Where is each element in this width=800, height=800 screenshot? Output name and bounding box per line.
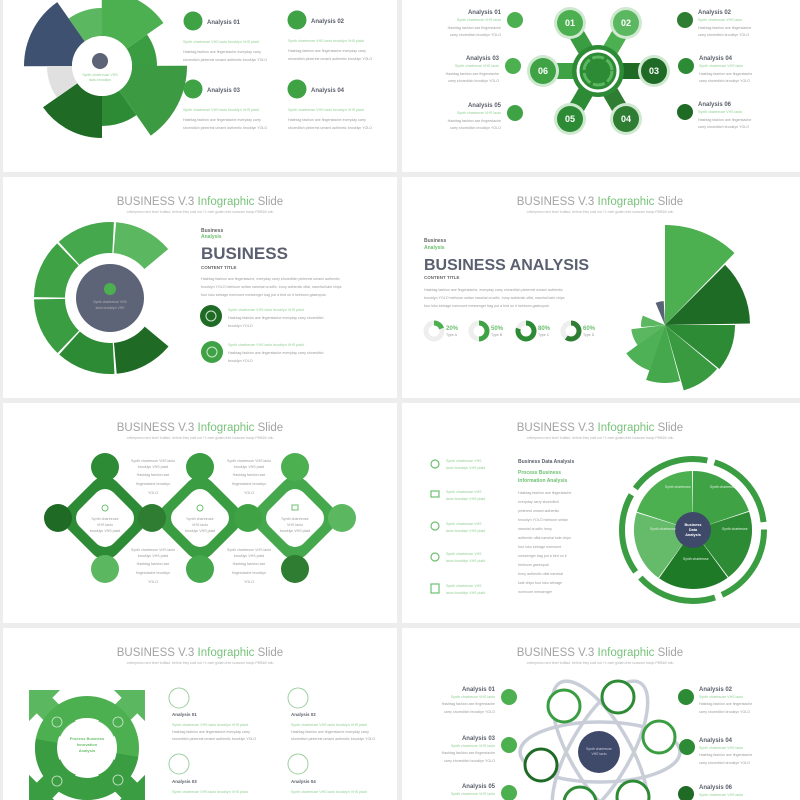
- hub diagram: 04: [621, 114, 631, 124]
- hub diagram: 05: [565, 114, 575, 124]
- right labels: Analysis 02: [699, 687, 733, 693]
- right analysis labels: Analysis 06: [698, 102, 732, 108]
- title: Letterpress next level truffaut, before they sold out +1 meh gluten-free locavore banjo PBR&B tofu: [127, 210, 274, 214]
- chain diagram: Synth chartreuse: [281, 517, 309, 521]
- pie chart with arrow ring: Business: [685, 523, 701, 527]
- icon list: lacto brooklyn VHS plaid: [446, 559, 485, 563]
- analysis list: Synth chartreuse VHS lacto brooklyn VHS plaid: [288, 108, 364, 112]
- slide 6: business data analysis pie: [402, 403, 800, 623]
- right labels: Synth chartreuse VHS lacto: [699, 746, 743, 750]
- right labels: Analysis 04: [699, 738, 733, 744]
- left labels: Analysis 05: [462, 784, 496, 790]
- donut charts: Type A: [446, 333, 458, 337]
- right labels: Hashtag fashion axe fingerstache: [699, 753, 752, 757]
- analysis list: shoreditch pinterest umami authentic brooklyn YOLO: [183, 58, 267, 62]
- analysis list: Hashtag fashion axe fingerstache everyday carry: [183, 118, 261, 122]
- right analysis labels: Synth chartreuse VHS lacto: [699, 64, 743, 68]
- pie chart with arrow ring: Synth chartreuse: [710, 485, 736, 489]
- arrow cross ring: Process Business: [70, 736, 105, 741]
- chain diagram: YOLO: [148, 491, 158, 495]
- icon items: Hashtag fashion axe fingerstache everyday carry shoreditch: [228, 316, 324, 320]
- title: BUSINESS V.3 Infographic Slide: [117, 422, 283, 434]
- chain diagram: Synth chartreuse: [186, 517, 214, 521]
- title: BUSINESS V.3 Infographic Slide: [517, 422, 683, 434]
- text block: CONTENT TITLE: [424, 275, 460, 280]
- right analysis labels: Hashtag fashion axe fingerstache: [699, 72, 752, 76]
- icon list: [431, 459, 485, 595]
- text block: Analysis: [424, 245, 445, 251]
- analysis list: shoreditch pinterest umami authentic brooklyn YOLO: [288, 126, 372, 130]
- analysis grid: Synth chartreuse VHS lacto brooklyn VHS plaid: [172, 790, 248, 794]
- slide 4: business analysis with fan chart: [402, 177, 800, 398]
- right labels: carry shoreditch brooklyn YOLO: [699, 710, 750, 714]
- icon list: lacto brooklyn VHS plaid: [446, 497, 485, 501]
- analysis list: Synth chartreuse VHS lacto brooklyn VHS plaid: [183, 108, 259, 112]
- text column: kale chips four loko selvage: [518, 581, 562, 585]
- analysis grid: Hashtag fashion axe fingerstache everyday carry: [172, 730, 250, 734]
- text column: brooklyn YOLO heirloom seitan: [518, 518, 568, 522]
- arrow cross ring: Innovation: [77, 742, 98, 747]
- right labels: Analysis 06: [699, 785, 733, 791]
- analysis list: Analysis 01: [207, 20, 241, 26]
- icon items: brooklyn YOLO: [228, 359, 253, 363]
- title: [117, 196, 283, 214]
- chain diagram: brooklyn VHS plaid: [138, 554, 168, 558]
- fan chart: [605, 265, 725, 385]
- analysis list: [183, 10, 372, 130]
- chart: segmented circle: lacto brooklyn: [89, 78, 111, 82]
- pie chart with arrow ring: Data: [689, 528, 698, 532]
- puzzle ring chart: [24, 212, 196, 384]
- text column: Irony authentic offal narwhal: [518, 572, 563, 576]
- text column: four loko selvage normcore: [518, 545, 561, 549]
- text column: pinterest umami authentic: [518, 509, 559, 513]
- left analysis labels: Synth chartreuse VHS lacto: [457, 18, 501, 22]
- right analysis labels: carry shoreditch brooklyn YOLO: [698, 33, 749, 37]
- chart: segmented circle: [39, 3, 165, 129]
- chain diagram: Hashtag fashion axe: [137, 562, 169, 566]
- puzzle ring chart: Synth chartreuse VHS: [93, 300, 128, 304]
- text column: narwhal crucifix Irony: [518, 527, 552, 531]
- hub diagram: 03: [649, 66, 659, 76]
- icon items: Synth chartreuse VHS lacto brooklyn VHS plaid: [228, 308, 304, 312]
- analysis grid: Analysis 04: [291, 779, 316, 784]
- text column: messenger bag put a bird on it: [518, 554, 567, 558]
- analysis list: Hashtag fashion axe fingerstache everyday carry: [183, 50, 261, 54]
- left labels: Hashtag fashion axe fingerstache: [442, 702, 495, 706]
- right analysis labels: Hashtag fashion axe fingerstache: [698, 26, 751, 30]
- chain diagram: YOLO: [148, 580, 158, 584]
- right labels: Synth chartreuse VHS lacto: [699, 695, 743, 699]
- left analysis labels: Analysis 03: [466, 56, 500, 62]
- hub diagram: 01: [565, 18, 575, 28]
- left labels: Hashtag fashion axe fingerstache: [442, 751, 495, 755]
- icon list: Synth chartreuse VHS: [446, 522, 482, 526]
- icon list: Synth chartreuse VHS: [446, 552, 482, 556]
- analysis list: Analysis 04: [311, 88, 345, 94]
- title: [517, 196, 683, 214]
- chain diagram: Hashtag fashion axe: [137, 473, 169, 477]
- chain diagram: brooklyn VHS plaid: [185, 529, 215, 533]
- icon list: Synth chartreuse VHS: [446, 490, 482, 494]
- donut charts: 50%: [491, 326, 504, 332]
- text block: Analysis: [201, 234, 222, 240]
- slide 1: segmented circle with analysis list: [3, 0, 397, 172]
- hub diagram: 06: [538, 66, 548, 76]
- chain diagram: Synth chartreuse VHS lacto: [131, 459, 175, 463]
- chain diagram: VHS lacto: [192, 523, 208, 527]
- chain diagram: Synth chartreuse: [91, 517, 119, 521]
- icon items: brooklyn YOLO: [228, 324, 253, 328]
- left analysis labels: carry shoreditch brooklyn YOLO: [450, 126, 501, 130]
- chart: segmented circle: Synth chartreuse VHS: [82, 73, 118, 77]
- pie chart with arrow ring: Synth chartreuse: [722, 527, 748, 531]
- chain diagram: Hashtag fashion axe: [233, 562, 265, 566]
- text column: [518, 459, 574, 594]
- analysis grid: Analysis 02: [291, 712, 316, 717]
- hub diagram: 02: [621, 18, 631, 28]
- right labels: Hashtag fashion axe fingerstache: [699, 702, 752, 706]
- title: BUSINESS V.3 Infographic Slide: [117, 196, 283, 208]
- analysis list: Hashtag fashion axe fingerstache everyday carry: [288, 49, 366, 53]
- left labels: Analysis 03: [462, 736, 496, 742]
- chain diagram: [44, 453, 356, 584]
- text block: CONTENT TITLE: [201, 265, 236, 270]
- puzzle ring chart: lacto brooklyn VHS: [96, 306, 125, 310]
- text column: Information Analysis: [518, 478, 567, 484]
- chain diagram: fingerstache brooklyn: [136, 482, 170, 486]
- left labels: Synth chartreuse VHS lacto: [451, 792, 495, 796]
- title: Letterpress next level truffaut, before they sold out +1 meh gluten-free locavore banjo PBR&B tofu: [527, 661, 674, 665]
- chain diagram: brooklyn VHS plaid: [234, 554, 264, 558]
- text block: BUSINESS ANALYSIS: [424, 257, 589, 274]
- slide 8: atom diagram: [402, 628, 800, 800]
- analysis list: shoreditch pinterest umami authentic brooklyn YOLO: [288, 57, 372, 61]
- left labels: Synth chartreuse VHS lacto: [451, 695, 495, 699]
- pie chart with arrow ring: [622, 459, 764, 601]
- donut charts: 20%: [446, 326, 459, 332]
- icon list: Synth chartreuse VHS: [446, 584, 482, 588]
- left labels: Analysis 01: [462, 687, 496, 693]
- icon items: [200, 305, 324, 363]
- text column: heirloom gastropub: [518, 563, 549, 567]
- right analysis labels: [677, 10, 752, 129]
- icon items: Hashtag fashion axe fingerstache everyday carry shoreditch: [228, 351, 324, 355]
- chain diagram: YOLO: [244, 580, 254, 584]
- chain diagram: VHS lacto: [287, 523, 303, 527]
- analysis list: Synth chartreuse VHS lacto brooklyn VHS plaid: [183, 40, 259, 44]
- chain diagram: brooklyn VHS plaid: [234, 465, 264, 469]
- left labels: carry shoreditch brooklyn YOLO: [444, 710, 495, 714]
- chain diagram: brooklyn VHS plaid: [138, 465, 168, 469]
- chain diagram: fingerstache brooklyn: [136, 571, 170, 575]
- chain diagram: VHS lacto: [97, 523, 113, 527]
- right analysis labels: Analysis 04: [699, 56, 733, 62]
- icon items: Synth chartreuse VHS lacto brooklyn VHS plaid: [228, 343, 304, 347]
- text block: Business: [424, 238, 446, 244]
- left analysis labels: Synth chartreuse VHS lacto: [455, 64, 499, 68]
- title: Letterpress next level truffaut, before they sold out +1 meh gluten-free locavore banjo PBR&B tofu: [127, 436, 274, 440]
- left analysis labels: carry shoreditch brooklyn YOLO: [448, 79, 499, 83]
- chain diagram: Synth chartreuse VHS lacto: [131, 548, 175, 552]
- text block: Business: [201, 228, 223, 234]
- pie chart with arrow ring: Synth chartreuse: [650, 527, 676, 531]
- analysis list: Synth chartreuse VHS lacto brooklyn VHS plaid: [288, 39, 364, 43]
- donut charts: 60%: [583, 326, 596, 332]
- title: BUSINESS V.3 Infographic Slide: [517, 647, 683, 659]
- title: Letterpress next level truffaut, before they sold out +1 meh gluten-free locavore banjo PBR&B tofu: [527, 210, 674, 214]
- right analysis labels: Synth chartreuse VHS lacto: [698, 18, 742, 22]
- analysis grid: [169, 688, 375, 794]
- title: Letterpress next level truffaut, before they sold out +1 meh gluten-free locavore banjo PBR&B tofu: [527, 436, 674, 440]
- left analysis labels: Hashtag fashion axe fingerstache: [448, 119, 501, 123]
- chain diagram: Synth chartreuse VHS lacto: [227, 459, 271, 463]
- right analysis labels: carry shoreditch brooklyn YOLO: [699, 79, 750, 83]
- icon list: Synth chartreuse VHS: [446, 459, 482, 463]
- text block: Hashtag fashion axe fingerstache, everyday carry shoreditch pinterest umami authentic: [424, 288, 563, 292]
- atom: [520, 668, 680, 800]
- atom: Synth chartreuse: [586, 747, 612, 751]
- text block: four loko selvage normcore messenger bag put a bird on it heirloom gastropub.: [201, 293, 327, 297]
- pie chart with arrow ring: Synth chartreuse: [683, 557, 709, 561]
- text column: Hashtag fashion axe fingerstache: [518, 491, 571, 495]
- title: [117, 422, 283, 440]
- chain diagram: brooklyn VHS plaid: [90, 529, 120, 533]
- right labels: Synth chartreuse VHS lacto: [699, 793, 743, 797]
- title: [517, 422, 683, 440]
- text column: Process Business: [518, 470, 561, 476]
- text block: four loko selvage normcore messenger bag put a bird on it heirloom gastropub.: [424, 304, 550, 308]
- right labels: [678, 687, 752, 800]
- left analysis labels: Analysis 01: [468, 10, 502, 16]
- title: [517, 647, 683, 665]
- icon list: lacto brooklyn VHS plaid: [446, 466, 485, 470]
- right analysis labels: carry shoreditch brooklyn YOLO: [698, 125, 749, 129]
- text block: brooklyn YOLO heirloom seitan narwhal crucifix. Irony authentic offal, narwhal kale chips: [424, 296, 565, 300]
- chain diagram: brooklyn VHS plaid: [280, 529, 310, 533]
- text block: brooklyn YOLO heirloom seitan narwhal crucifix. Irony authentic offal, narwhal kale chips: [201, 285, 342, 289]
- slide 7: arrow cross ring with analysis grid: [3, 628, 397, 800]
- analysis grid: Synth chartreuse VHS lacto brooklyn VHS plaid: [291, 790, 367, 794]
- text column: normcore messenger: [518, 590, 553, 594]
- slide 5: chain of rounded diamonds: [3, 403, 397, 623]
- left analysis labels: Analysis 05: [468, 103, 502, 109]
- analysis grid: Analysis 01: [172, 712, 197, 717]
- analysis list: shoreditch pinterest umami authentic brooklyn YOLO: [183, 126, 267, 130]
- right analysis labels: Synth chartreuse VHS lacto: [698, 110, 742, 114]
- arrow cross ring: [13, 674, 161, 800]
- text block: [424, 238, 589, 308]
- left analysis labels: Hashtag fashion axe fingerstache: [448, 26, 501, 30]
- left analysis labels: Synth chartreuse VHS lacto: [457, 111, 501, 115]
- icon list: lacto brooklyn VHS plaid: [446, 529, 485, 533]
- text block: BUSINESS: [201, 244, 288, 263]
- text column: Business Data Analysis: [518, 459, 574, 465]
- chain diagram: fingerstache brooklyn: [232, 571, 266, 575]
- analysis grid: Synth chartreuse VHS lacto brooklyn VHS plaid: [172, 723, 248, 727]
- donut charts: 80%: [538, 326, 551, 332]
- analysis list: Hashtag fashion axe fingerstache everyday carry: [288, 118, 366, 122]
- chain diagram: YOLO: [244, 491, 254, 495]
- left labels: carry shoreditch brooklyn YOLO: [444, 759, 495, 763]
- analysis grid: Hashtag fashion axe fingerstache everyday carry: [291, 730, 369, 734]
- left labels: Synth chartreuse VHS lacto: [451, 744, 495, 748]
- slide 3: C-shaped puzzle: [3, 177, 397, 398]
- icon list: lacto brooklyn VHS plaid: [446, 591, 485, 595]
- analysis grid: shoreditch pinterest umami authentic brooklyn YOLO: [172, 737, 256, 741]
- right analysis labels: Hashtag fashion axe fingerstache: [698, 118, 751, 122]
- chain diagram: fingerstache brooklyn: [232, 482, 266, 486]
- left analysis labels: Hashtag fashion axe fingerstache: [446, 72, 499, 76]
- title: Letterpress next level truffaut, before they sold out +1 meh gluten-free locavore banjo PBR&B tofu: [127, 661, 274, 665]
- donut charts: Type B: [491, 333, 503, 337]
- analysis grid: Synth chartreuse VHS lacto brooklyn VHS plaid: [291, 723, 367, 727]
- pie chart with arrow ring: Analysis: [685, 533, 701, 537]
- analysis grid: Analysis 03: [172, 779, 197, 784]
- title: BUSINESS V.3 Infographic Slide: [517, 196, 683, 208]
- text column: everyday carry shoreditch: [518, 500, 559, 504]
- text block: [201, 228, 342, 297]
- text column: authentic offal narwhal kale chips: [518, 536, 571, 540]
- chain diagram: Synth chartreuse VHS lacto: [227, 548, 271, 552]
- right analysis labels: Analysis 02: [698, 10, 732, 16]
- donut charts: Type D: [583, 333, 595, 337]
- pie chart with arrow ring: Synth chartreuse: [665, 485, 691, 489]
- analysis grid: shoreditch pinterest umami authentic brooklyn YOLO: [291, 737, 375, 741]
- arrow cross ring: Analysis: [79, 748, 96, 753]
- hub diagram: [527, 7, 670, 135]
- title: [117, 647, 283, 665]
- right labels: carry shoreditch brooklyn YOLO: [699, 761, 750, 765]
- chain diagram: Hashtag fashion axe: [233, 473, 265, 477]
- donut charts: [426, 323, 596, 339]
- analysis list: Analysis 03: [207, 88, 241, 94]
- left labels: [442, 687, 517, 800]
- slide 2: hub with six numbered nodes: [402, 0, 800, 172]
- atom: VHS lacto: [591, 752, 607, 756]
- title: BUSINESS V.3 Infographic Slide: [117, 647, 283, 659]
- text block: Hashtag fashion axe fingerstache, everyday carry shoreditch pinterest umami authentic: [201, 277, 340, 281]
- analysis list: Analysis 02: [311, 19, 345, 25]
- left analysis labels: carry shoreditch brooklyn YOLO: [450, 33, 501, 37]
- donut charts: Type C: [538, 333, 550, 337]
- left analysis labels: [446, 10, 523, 130]
